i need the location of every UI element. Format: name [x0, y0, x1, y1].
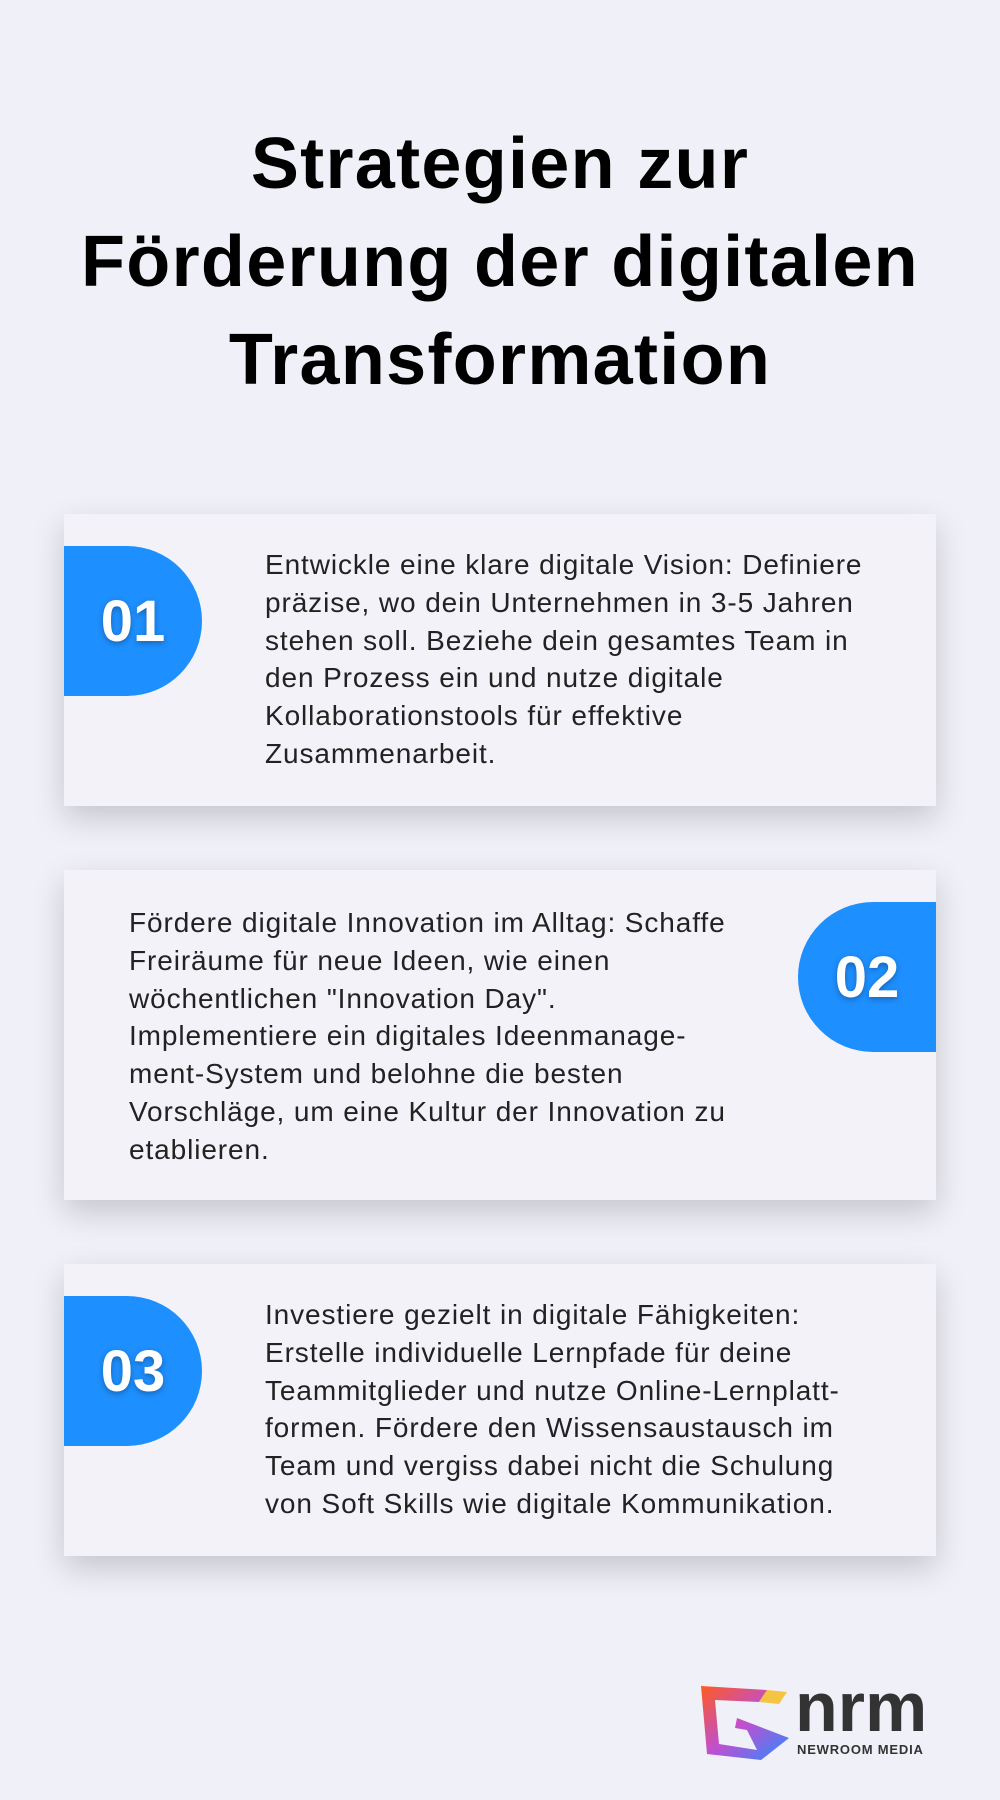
text step 2: Fördere digitale Innovation im Alltag: Schaffe: [129, 907, 726, 938]
text step 2: Vorschläge, um eine Kultur der Innovation zu: [129, 1096, 726, 1127]
badge 03: 03: [101, 1338, 165, 1404]
logo text: nrm: [795, 1668, 927, 1746]
text step 1: Zusammenarbeit.: [265, 738, 496, 769]
badge 02: 02: [835, 944, 899, 1010]
badge 01: 01: [101, 588, 165, 654]
text step 3: Erstelle individuelle Lernpfade für deine: [265, 1337, 792, 1368]
badge 01: [64, 546, 202, 696]
panel: step 3: [64, 1264, 936, 1556]
title: [81, 124, 919, 400]
text step 2: ment-System und belohne die besten: [129, 1058, 623, 1089]
text step 1: den Prozess ein und nutze digitale: [265, 662, 724, 693]
text step 3: [265, 1299, 840, 1519]
panel: step 1: [64, 514, 936, 806]
text step 2: [129, 907, 726, 1165]
logo: [701, 1668, 927, 1760]
icon: logo mark: [701, 1686, 789, 1760]
text step 2: wöchentlichen "Innovation Day".: [129, 983, 557, 1014]
title: Transformation: [229, 320, 771, 400]
text step 3: Investiere gezielt in digitale Fähigkeiten:: [265, 1299, 800, 1330]
text step 2: Freiräume für neue Ideen, wie einen: [129, 945, 610, 976]
logo: NEWROOM MEDIA: [797, 1742, 924, 1757]
text step 3: Team und vergiss dabei nicht die Schulung: [265, 1450, 834, 1481]
text step 1: Entwickle eine klare digitale Vision: Definiere: [265, 549, 862, 580]
text step 3: von Soft Skills wie digitale Kommunikation.: [265, 1488, 834, 1519]
text step 2: etablieren.: [129, 1134, 270, 1165]
text step 1: präzise, wo dein Unternehmen in 3-5 Jahren: [265, 587, 854, 618]
badge 02: [798, 902, 936, 1052]
text step 2: Implementiere ein digitales Ideenmanage-: [129, 1020, 686, 1051]
title: Strategien zur: [251, 124, 749, 204]
text step 3: formen. Fördere den Wissensaustausch im: [265, 1412, 834, 1443]
text step 1: Kollaborationstools für effektive: [265, 700, 683, 731]
text step 3: Teammitglieder und nutze Online-Lernplatt-: [265, 1375, 840, 1406]
panel: step 2: [64, 870, 936, 1200]
text step 1: stehen soll. Beziehe dein gesamtes Team in: [265, 625, 849, 656]
title: Förderung der digitalen: [81, 222, 919, 302]
badge 03: [64, 1296, 202, 1446]
text step 1: [265, 549, 862, 769]
